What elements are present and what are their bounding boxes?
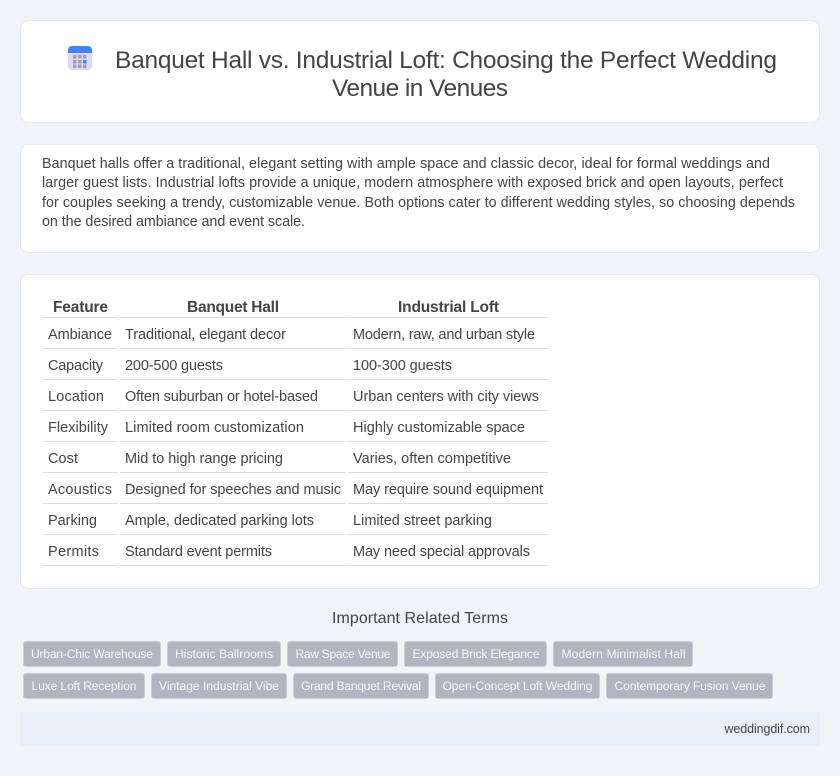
row: capacity: Capacity — [48, 358, 104, 374]
footer: weddingdif.com — [724, 722, 810, 736]
row: permits — [48, 544, 530, 560]
row: ambiance: Ambiance — [48, 327, 112, 343]
row: cost: Varies, often competitive — [353, 451, 511, 467]
row: capacity: 100-300 guests — [353, 358, 452, 374]
row: parking: Limited street parking — [353, 513, 492, 529]
row: capacity — [48, 358, 452, 374]
row: acoustics: Acoustics — [48, 482, 112, 498]
row: cost: Cost — [48, 451, 78, 467]
table header: Industrial Loft — [398, 299, 499, 316]
row: cost — [48, 451, 511, 467]
row: flexibility: Highly customizable space — [353, 420, 525, 436]
panel: intro paragraph — [20, 144, 820, 252]
row: permits: Permits — [48, 544, 99, 560]
tag group: related terms: Vintage Industrial Vibe — [159, 679, 279, 693]
row: parking: Parking — [48, 513, 97, 529]
row: acoustics — [48, 482, 543, 498]
row: location: Often suburban or hotel-based — [125, 389, 318, 405]
row: cost: Mid to high range pricing — [125, 451, 283, 467]
tag group: related terms: Grand Banquet Revival — [301, 679, 421, 693]
row: flexibility: Limited room customization — [125, 420, 304, 436]
panel: intro paragraph: for couples seeking a trendy, customizable venue. Both options cater to different wedding styles, so choosing depends — [42, 195, 795, 211]
tag group: related terms: Historic Ballrooms — [175, 647, 273, 661]
tag group: related terms: Contemporary Fusion Venue — [614, 679, 766, 693]
icon: calendar — [68, 46, 92, 70]
tag group: related terms: Modern Minimalist Hall — [562, 647, 686, 661]
title — [115, 47, 777, 102]
panel: intro paragraph: Banquet halls offer a traditional, elegant setting with ample space and classic decor, ideal for formal weddings and — [42, 156, 770, 172]
panel: comparison table — [20, 274, 820, 588]
tag group: related terms: Open-Concept Loft Wedding — [442, 679, 592, 693]
panel: title header — [20, 20, 820, 122]
panel: intro paragraph: larger guest lists. Industrial lofts provide a unique, modern atmosphere with exposed brick and open layouts, perfect — [42, 175, 783, 191]
table header — [53, 299, 499, 316]
row: parking — [48, 513, 492, 529]
panel: intro paragraph: on the desired ambiance and event scale. — [42, 214, 305, 230]
row: ambiance — [48, 327, 535, 343]
tag group: related terms: Luxe Loft Reception — [32, 679, 136, 693]
row: parking: Ample, dedicated parking lots — [125, 513, 314, 529]
row: acoustics: Designed for speeches and music — [125, 482, 341, 498]
heading: related terms: Important Related Terms — [332, 610, 508, 627]
tag group: related terms: Raw Space Venue — [296, 647, 391, 661]
title: Banquet Hall vs. Industrial Loft: Choosing the Perfect Wedding — [115, 47, 777, 74]
title: Venue in Venues — [332, 75, 508, 102]
tag group: related terms: Urban-Chic Warehouse — [31, 647, 153, 661]
footer — [20, 712, 820, 746]
table header: Feature — [53, 299, 108, 316]
table header: Banquet Hall — [187, 299, 279, 316]
row: location — [48, 389, 539, 405]
row: permits: Standard event permits — [125, 544, 272, 560]
row: ambiance: Traditional, elegant decor — [125, 327, 286, 343]
row: location: Location — [48, 389, 104, 405]
row: capacity: 200-500 guests — [125, 358, 223, 374]
row: flexibility — [48, 420, 525, 436]
row: permits: May need special approvals — [353, 544, 530, 560]
tag group: related terms — [24, 642, 772, 698]
row: ambiance: Modern, raw, and urban style — [353, 327, 535, 343]
row: acoustics: May require sound equipment — [353, 482, 543, 498]
tag group: related terms: Exposed Brick Elegance — [412, 647, 540, 661]
row: flexibility: Flexibility — [48, 420, 109, 436]
row: location: Urban centers with city views — [353, 389, 539, 405]
